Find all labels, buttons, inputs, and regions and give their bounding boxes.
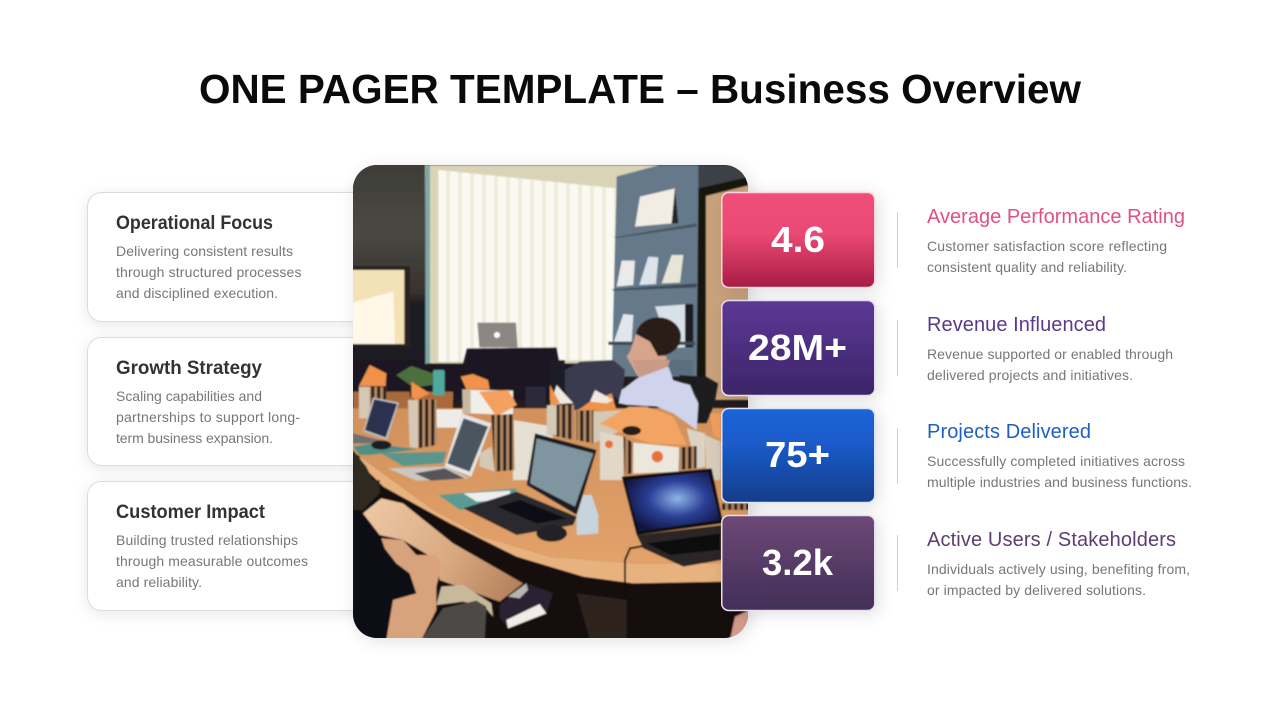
description: Active Users / Stakeholders: Active Users / Stakeholders [927, 529, 1176, 551]
description: Revenue Influenced: Revenue Influenced [927, 314, 1106, 336]
card: Growth Strategy: Scaling capabilities and [116, 388, 262, 404]
description: Active Users / Stakeholders: or impacted by delivered solutions. [927, 582, 1146, 598]
stat tile: 4.6 [722, 192, 875, 288]
card: Growth Strategy: Growth Strategy [116, 358, 262, 379]
card: Growth Strategy [88, 338, 378, 466]
stat tile: 28M+ [722, 300, 875, 396]
description: Active Users / Stakeholders [927, 529, 1190, 598]
description: Revenue Influenced: Revenue supported or enabled through [927, 346, 1173, 362]
description: Average Performance Rating: Customer satisfaction score reflecting [927, 238, 1167, 254]
card: Customer Impact: and reliability. [116, 574, 202, 590]
stat tile: 75+: 75+ [765, 434, 830, 475]
stat tile: 75+ [722, 408, 875, 502]
card: Operational Focus: Delivering consistent results [116, 243, 293, 259]
description: Revenue Influenced [927, 314, 1173, 383]
card: Customer Impact: Customer Impact [116, 502, 266, 523]
stat tile: 28M+: 28M+ [748, 327, 847, 368]
card: Operational Focus: through structured processes [116, 264, 302, 280]
stat tile: 3.2k [722, 516, 875, 610]
card: Operational Focus [88, 192, 378, 322]
panel: left info cards [88, 192, 378, 610]
description: Average Performance Rating [927, 206, 1185, 275]
stat tile: 3.2k: 3.2k [762, 542, 834, 583]
card: Customer Impact: Building trusted relationships [116, 532, 298, 548]
card: Operational Focus: and disciplined execution. [116, 285, 278, 301]
description: Revenue Influenced: delivered projects and initiatives. [927, 367, 1133, 383]
photo: business meeting around a conference table [350, 160, 750, 640]
card: Customer Impact: through measurable outcomes [116, 553, 308, 569]
description: Projects Delivered [927, 421, 1192, 490]
description: Active Users / Stakeholders: Individuals actively using, benefiting from, [927, 561, 1190, 577]
card: Growth Strategy: partnerships to support long- [116, 409, 300, 425]
panel: metric descriptions [927, 206, 1192, 598]
stat tile: 4.6: 4.6 [771, 219, 825, 260]
panel: metric tiles [722, 192, 875, 610]
card: Operational Focus: Operational Focus [116, 213, 273, 234]
description: Projects Delivered: multiple industries and business functions. [927, 474, 1192, 490]
description: Projects Delivered: Successfully completed initiatives across [927, 453, 1185, 469]
description: Average Performance Rating: Average Performance Rating [927, 206, 1185, 228]
card: Growth Strategy: term business expansion. [116, 430, 273, 446]
description: Projects Delivered: Projects Delivered [927, 421, 1091, 443]
card: Customer Impact [88, 482, 378, 610]
description: Average Performance Rating: consistent quality and reliability. [927, 259, 1127, 275]
title: ONE PAGER TEMPLATE – Business Overview [199, 66, 1081, 112]
